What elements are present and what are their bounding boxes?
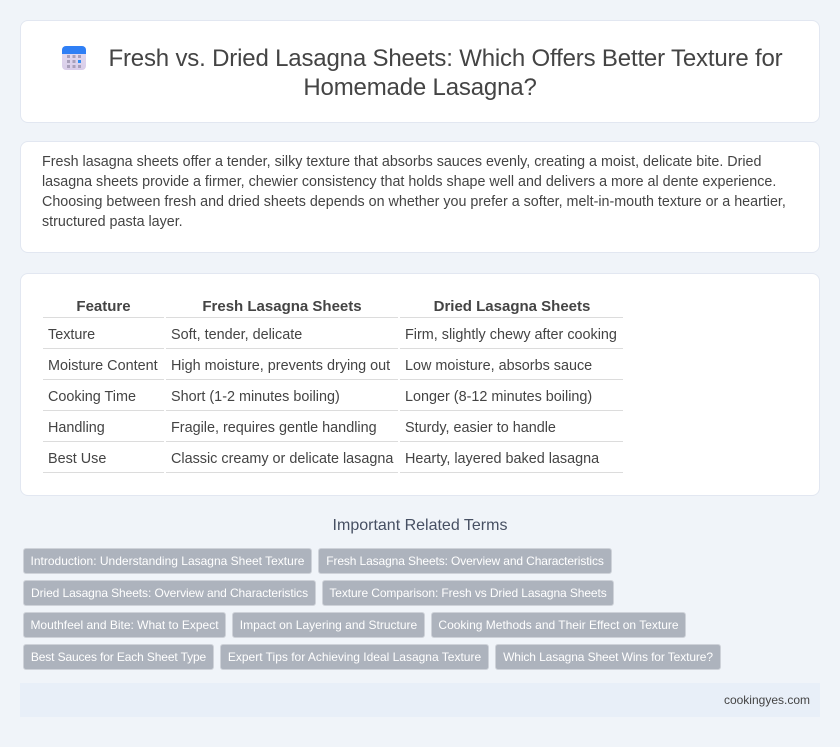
- footer bar: [20, 683, 820, 717]
- title: Homemade Lasagna?: [303, 74, 537, 101]
- title: [108, 45, 783, 101]
- comparison table: Low moisture, absorbs sauce: [405, 358, 592, 374]
- comparison table: Short (1-2 minutes boiling): [171, 389, 340, 405]
- tag list: Cooking Methods and Their Effect on Texture: [438, 618, 679, 632]
- tag list: Texture Comparison: Fresh vs Dried Lasagna Sheets: [329, 586, 607, 600]
- comparison table: Sturdy, easier to handle: [405, 420, 556, 436]
- comparison table: Longer (8-12 minutes boiling): [405, 389, 592, 405]
- text block: intro: Fresh lasagna sheets offer a tender, silky texture that absorbs sauces evenly, creating a moist, delicate bite. Dried: [42, 154, 761, 170]
- comparison table: Hearty, layered baked lasagna: [405, 451, 599, 467]
- text block: intro: Choosing between fresh and dried sheets depends on whether you prefer a softer, melt-in-mouth texture or a heartier,: [42, 194, 786, 210]
- comparison table: Feature: [76, 298, 131, 315]
- comparison table: Dried Lasagna Sheets: [434, 298, 590, 315]
- comparison table: Soft, tender, delicate: [171, 327, 302, 343]
- comparison table: Fragile, requires gentle handling: [171, 420, 377, 436]
- tag list: Fresh Lasagna Sheets: Overview and Characteristics: [326, 554, 604, 568]
- tag list: Expert Tips for Achieving Ideal Lasagna Texture: [228, 650, 481, 664]
- comparison table: Texture: [48, 327, 95, 343]
- comparison table: Handling: [48, 420, 105, 436]
- comparison table: Cooking Time: [48, 389, 136, 405]
- tag list: Introduction: Understanding Lasagna Sheet Texture: [31, 554, 304, 568]
- title: Fresh vs. Dried Lasagna Sheets: Which Offers Better Texture for: [108, 45, 783, 72]
- comparison table: Moisture Content: [48, 358, 158, 374]
- text block: intro: structured pasta layer.: [42, 214, 183, 230]
- tag list: [23, 548, 721, 670]
- footer brand: cookingyes.com: [724, 693, 810, 707]
- tag list: Dried Lasagna Sheets: Overview and Characteristics: [31, 586, 308, 600]
- comparison table: High moisture, prevents drying out: [171, 358, 390, 374]
- comparison table: Classic creamy or delicate lasagna: [171, 451, 393, 467]
- tag list: Which Lasagna Sheet Wins for Texture?: [503, 650, 713, 664]
- comparison table: Best Use: [48, 451, 106, 467]
- panel: title card: [20, 20, 820, 123]
- icon: calendar: [62, 46, 86, 70]
- comparison table: Firm, slightly chewy after cooking: [405, 327, 617, 343]
- tag list: Mouthfeel and Bite: What to Expect: [30, 618, 219, 632]
- tag list: Best Sauces for Each Sheet Type: [31, 650, 206, 664]
- text block: intro: [42, 154, 786, 230]
- panel: comparison table card: [20, 273, 820, 496]
- comparison table: Fresh Lasagna Sheets: [202, 298, 362, 315]
- tag list: Impact on Layering and Structure: [240, 618, 417, 632]
- panel: intro card: [20, 141, 820, 253]
- text block: intro: lasagna sheets provide a firmer, chewier consistency that holds shape well and delivers a more al dente experience.: [42, 174, 776, 190]
- heading: related terms: Important Related Terms: [333, 517, 507, 534]
- comparison table: [43, 298, 623, 473]
